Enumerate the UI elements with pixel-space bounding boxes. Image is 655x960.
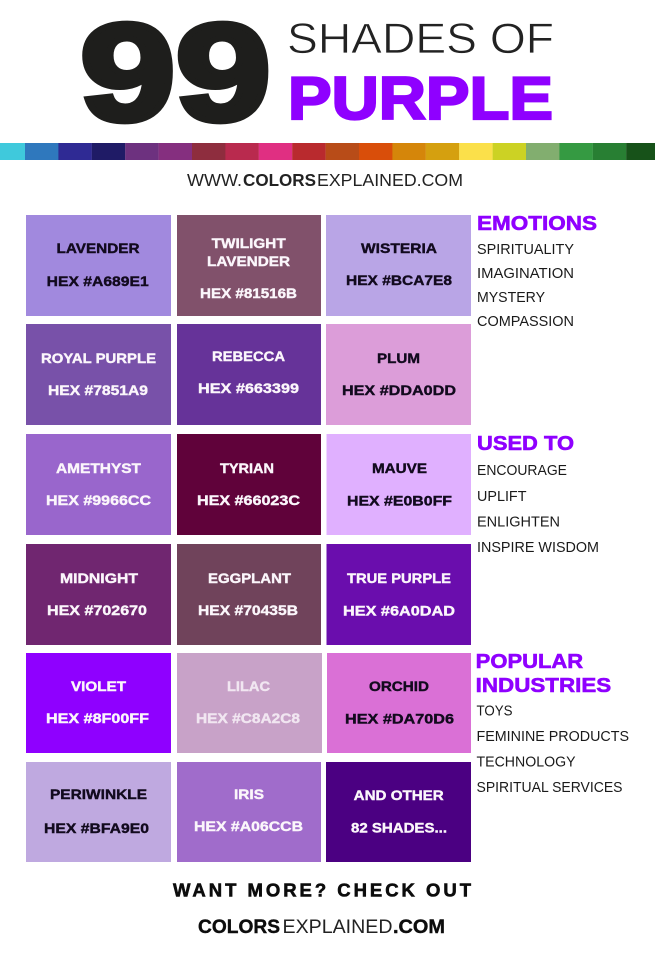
website url: WWW.: [187, 170, 242, 190]
swatch: lilac: LILAC: [227, 678, 270, 694]
panel: emotions: COMPASSION: [477, 313, 574, 330]
swatch: orchid: [327, 653, 471, 753]
swatch: plum: HEX #DDA0DD: [342, 382, 456, 398]
swatch: eggplant: HEX #70435B: [198, 602, 298, 618]
panel: used to: [477, 432, 599, 556]
panel: used to: UPLIFT: [477, 488, 526, 505]
swatch: eggplant: EGGPLANT: [208, 570, 291, 586]
swatch: lavender: [26, 215, 171, 316]
swatch: mauve: MAUVE: [372, 460, 427, 476]
panel: emotions: MYSTERY: [477, 289, 545, 306]
swatch: eggplant: [177, 544, 321, 645]
footer website: [198, 916, 445, 938]
panel: popular industries: INDUSTRIES: [476, 674, 611, 697]
title line: shades of: SHADES OF: [287, 15, 554, 63]
swatch: iris: IRIS: [234, 786, 264, 802]
swatch: royal purple: [26, 324, 171, 425]
swatch: periwinkle: PERIWINKLE: [50, 786, 147, 802]
swatch: midnight: HEX #702670: [47, 602, 147, 618]
heading: emotions: EMOTIONS: [477, 212, 597, 235]
heading: popular industries: POPULAR: [476, 650, 583, 673]
swatch: plum: PLUM: [377, 350, 420, 366]
swatch: plum: [326, 324, 471, 425]
swatch: violet: VIOLET: [71, 678, 126, 694]
swatch: and other 82 shades: [326, 762, 471, 862]
swatch: wisteria: HEX #BCA7E8: [346, 272, 452, 288]
panel: emotions: IMAGINATION: [477, 265, 574, 282]
footer website: EXPLAINED: [282, 916, 392, 938]
swatch: mauve: HEX #E0B0FF: [347, 492, 452, 508]
swatch: amethyst: [26, 434, 171, 535]
panel: used to: INSPIRE WISDOM: [477, 539, 599, 556]
swatch: lilac: HEX #C8A2C8: [196, 710, 300, 726]
swatch: amethyst: AMETHYST: [56, 460, 141, 476]
rainbow colour band: [0, 143, 655, 160]
footer website: .COM: [393, 916, 445, 938]
swatch: and other 82 shades: AND OTHER: [354, 787, 444, 803]
swatch: wisteria: [326, 215, 471, 316]
swatch: iris: HEX #A06CCB: [194, 818, 303, 834]
swatch: true purple: HEX #6A0DAD: [343, 602, 455, 618]
website url: [187, 170, 463, 190]
swatch: periwinkle: HEX #BFA9E0: [44, 820, 149, 836]
swatch: rebecca: HEX #663399: [198, 380, 299, 396]
panel: popular industries: FEMININE PRODUCTS: [476, 728, 629, 745]
title: [80, 0, 554, 150]
swatch: periwinkle: [26, 762, 171, 862]
swatch: true purple: [326, 544, 471, 645]
title number 99: 99: [80, 0, 271, 150]
swatch: royal purple: HEX #7851A9: [48, 382, 148, 398]
swatch: midnight: MIDNIGHT: [60, 570, 138, 586]
swatch: lilac: [177, 653, 322, 753]
swatch: twilight lavender: TWILIGHT: [212, 235, 286, 251]
panel: popular industries: TECHNOLOGY: [476, 754, 576, 770]
swatch: twilight lavender: HEX #81516B: [200, 285, 297, 301]
website url: EXPLAINED.COM: [317, 170, 463, 190]
swatch: twilight lavender: LAVENDER: [207, 253, 290, 269]
swatch: rebecca: [177, 324, 321, 425]
footer call to action: WANT MORE? CHECK OUT: [173, 880, 472, 900]
swatch: iris: [177, 762, 321, 862]
swatch: violet: [26, 653, 171, 753]
swatch: rebecca: REBECCA: [212, 348, 285, 364]
swatch: violet: HEX #8F00FF: [46, 710, 150, 726]
swatch: and other 82 shades: 82 SHADES...: [351, 820, 447, 836]
panel: emotions: [477, 212, 597, 330]
panel: used to: ENCOURAGE: [477, 462, 567, 479]
swatch: tyrian: [177, 434, 321, 535]
footer website: COLORS: [198, 916, 280, 938]
website url: COLORS: [243, 170, 316, 190]
swatch: wisteria: WISTERIA: [361, 240, 437, 256]
swatch: orchid: HEX #DA70D6: [345, 710, 454, 726]
panel: emotions: SPIRITUALITY: [477, 241, 574, 258]
panel: used to: ENLIGHTEN: [477, 514, 560, 530]
swatch: amethyst: HEX #9966CC: [46, 492, 151, 508]
swatch: royal purple: ROYAL PURPLE: [41, 350, 156, 366]
swatch: tyrian: HEX #66023C: [197, 492, 300, 508]
swatch: twilight lavender: [177, 215, 321, 316]
swatch: lavender: HEX #A689E1: [47, 273, 149, 289]
heading: used to: USED TO: [477, 432, 574, 455]
panel: popular industries: [476, 650, 629, 796]
swatch: midnight: [26, 544, 171, 645]
panel: popular industries: SPIRITUAL SERVICES: [476, 779, 622, 796]
swatch: mauve: [326, 434, 471, 535]
title line: purple: PURPLE: [288, 65, 553, 132]
swatch: orchid: ORCHID: [369, 678, 429, 694]
swatch: true purple: TRUE PURPLE: [347, 570, 451, 586]
swatch: tyrian: TYRIAN: [220, 460, 274, 476]
panel: popular industries: TOYS: [476, 702, 512, 720]
swatch: lavender: LAVENDER: [56, 240, 140, 256]
